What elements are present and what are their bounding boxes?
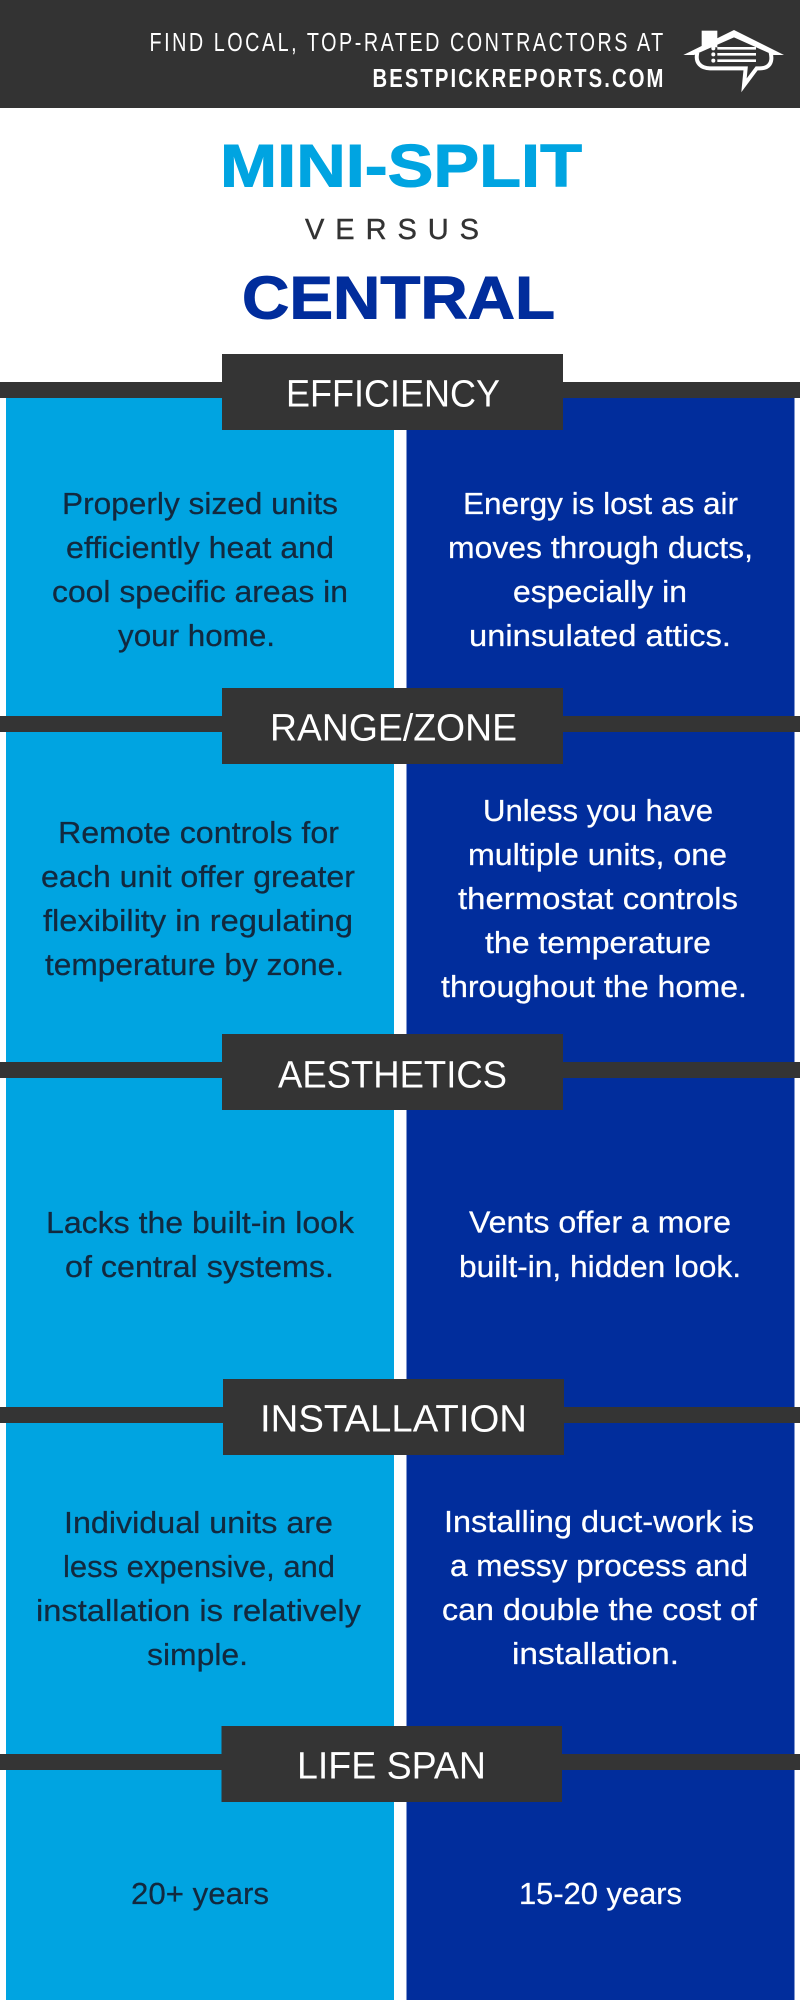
title: central: CENTRAL (242, 264, 555, 332)
text: installation mini-split: simple. (147, 1637, 248, 1672)
text: installation central (442, 1504, 757, 1671)
text: installation mini-split: Individual units are (64, 1505, 333, 1540)
text: life span mini-split: 20+ years (131, 1876, 269, 1911)
text: range/zone central: thermostat controls (458, 881, 738, 916)
text: range/zone mini-split (41, 815, 355, 982)
text: installation central: a messy process and (450, 1548, 748, 1583)
text: aesthetics mini-split (46, 1205, 355, 1284)
column: mini-split (6, 398, 394, 2000)
section heading: installation (0, 1379, 800, 1455)
text: range/zone mini-split: temperature by zone. (45, 947, 344, 982)
section heading: life span: LIFE SPAN (297, 1746, 486, 1788)
title: MINI-SPLIT (220, 132, 582, 200)
text: installation central: installation. (512, 1636, 679, 1671)
text: range/zone central: throughout the home. (441, 969, 747, 1004)
text: efficiency mini-split: efficiently heat and (66, 530, 334, 565)
text: efficiency central: Energy is lost as air (463, 486, 738, 521)
section heading: range/zone (0, 688, 800, 764)
section heading: efficiency: EFFICIENCY (286, 374, 500, 416)
text: installation mini-split: installation is relatively (36, 1593, 362, 1628)
text: installation mini-split: less expensive, and (63, 1549, 335, 1584)
section heading: installation: INSTALLATION (260, 1398, 527, 1440)
title (220, 132, 582, 332)
text: efficiency central: moves through ducts, (448, 530, 753, 565)
section heading: aesthetics (0, 1034, 800, 1110)
text: efficiency central (448, 486, 753, 653)
section heading: aesthetics: AESTHETICS (278, 1054, 507, 1096)
text: range/zone central: Unless you have (483, 793, 713, 828)
text: efficiency mini-split: your home. (118, 618, 275, 653)
text: range/zone central (441, 793, 747, 1004)
text: installation mini-split (36, 1505, 362, 1672)
header banner (0, 0, 800, 108)
text: life span central: 15-20 years (519, 1876, 682, 1911)
text: aesthetics central: built-in, hidden look. (459, 1249, 741, 1284)
text: installation central: can double the cost of (442, 1592, 757, 1627)
header text: BESTPICKREPORTS.COM (372, 64, 663, 93)
text: efficiency mini-split: Properly sized units (62, 486, 338, 521)
section heading: life span (0, 1726, 800, 1802)
text: range/zone mini-split: flexibility in regulating (43, 903, 353, 938)
text: efficiency central: especially in (513, 574, 687, 609)
text: installation central: Installing duct-work is (444, 1504, 754, 1539)
text: efficiency central: uninsulated attics. (469, 618, 731, 653)
text: range/zone central: multiple units, one (468, 837, 727, 872)
section heading: efficiency (0, 354, 800, 430)
text: aesthetics mini-split: Lacks the built-in look (46, 1205, 355, 1240)
column: central (406, 398, 794, 2000)
text: aesthetics central (459, 1204, 741, 1284)
icon: house speech bubble logo (683, 30, 784, 85)
text: range/zone central: the temperature (485, 925, 711, 960)
text: range/zone mini-split: each unit offer greater (41, 859, 355, 894)
header text (150, 27, 663, 93)
text: aesthetics central: Vents offer a more (469, 1204, 731, 1240)
text: aesthetics mini-split: of central systems. (65, 1249, 334, 1284)
text: range/zone mini-split: Remote controls for (58, 815, 339, 850)
section heading: range/zone: RANGE/ZONE (270, 708, 517, 750)
header text: FIND LOCAL, TOP-RATED CONTRACTORS AT (150, 27, 663, 57)
text: efficiency mini-split: cool specific areas in (52, 574, 348, 609)
subtitle: versus: VERSUS (305, 214, 479, 246)
text: efficiency mini-split (52, 486, 348, 653)
